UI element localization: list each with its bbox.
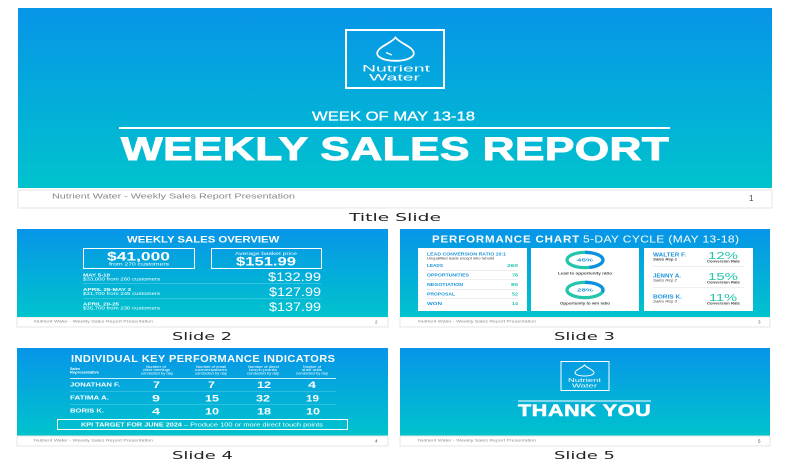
kpi box: total sales xyxy=(84,248,194,268)
heading: WEEKLY SALES OVERVIEW xyxy=(127,235,280,245)
callout: kpi target: KPI TARGET FOR JUNE 2024 xyxy=(81,422,182,428)
row: may 5-10: $33,000 from 260 customers xyxy=(83,276,161,282)
panel: title slide xyxy=(18,8,772,208)
table header: Sales xyxy=(70,367,80,371)
card: lead conversion: PROPOSAL xyxy=(427,292,455,296)
kpi box: basket price: $151.99 xyxy=(236,256,296,268)
card: lead conversion xyxy=(418,248,527,311)
caption: slide 2: Slide 2 xyxy=(172,330,232,343)
heading: thank you: THANK YOU xyxy=(518,402,651,420)
row: april 20-25: $137.99 xyxy=(269,302,321,314)
logo: Nutrient Water: Water xyxy=(369,72,420,84)
row: jonathan f. xyxy=(70,380,317,391)
card: sales reps: Sales Rep 2 xyxy=(653,278,678,282)
row: boris k.: 18 xyxy=(257,406,271,418)
table header: Number of direct xyxy=(248,365,279,369)
card: sales reps: WALTER F. xyxy=(653,252,687,258)
kpi box: basket price xyxy=(212,248,322,268)
panel: slide 4 kpi table xyxy=(17,348,388,446)
table header: Number of email xyxy=(196,365,226,369)
card: sales reps: Conversion Rate xyxy=(707,300,741,306)
divider line xyxy=(119,127,670,129)
heading: weekly sales report: WEEKLY SALES REPORT xyxy=(121,132,669,167)
row: jonathan f.: 7 xyxy=(208,380,215,391)
row: jonathan f.: 7 xyxy=(153,380,160,391)
footer text: Nutrient Water - Weekly Sales Report Presentation xyxy=(52,194,295,200)
card: lead conversion: NEGOTIATION xyxy=(427,282,463,287)
page number: 4 xyxy=(375,438,378,444)
row: april 29-may 3: APRIL 29-MAY 3 xyxy=(83,287,132,292)
row: may 5-10: MAY 5-10 xyxy=(83,272,111,278)
kpi box: basket price: Average basket price xyxy=(235,251,297,257)
card: sales reps: 11% xyxy=(709,293,737,304)
logo: Nutrient Water: Nutrient xyxy=(568,378,602,384)
heading: 5-day cycle: 5-DAY CYCLE (MAY 13-18) xyxy=(583,234,739,245)
table header xyxy=(70,365,328,376)
donut chart: 45% lead to opportunity: 45% xyxy=(577,258,593,262)
card: lead conversion: Unqualified leads except who rebuild xyxy=(427,256,494,260)
row: jonathan f.: 4 xyxy=(308,380,317,391)
card: sales reps: 12% xyxy=(708,251,738,262)
row: boris k. xyxy=(70,406,320,418)
table header: Number of xyxy=(146,365,166,369)
card: sales reps: JENNY A. xyxy=(653,274,682,280)
row: boris k.: 4 xyxy=(152,406,161,418)
page number: 5 xyxy=(758,438,761,444)
table header: Representative xyxy=(70,370,99,374)
row: may 5-10: $132.99 xyxy=(268,272,321,284)
row: jonathan f.: 12 xyxy=(257,380,271,391)
footer text: Nutrient Water - Weekly Sales Report Presentation xyxy=(418,438,536,442)
row: fatima a. xyxy=(70,394,319,404)
table header: conducted by day xyxy=(195,372,227,376)
kpi box: total sales: $41,000 xyxy=(107,252,170,264)
row: boris k.: 10 xyxy=(306,406,320,418)
donut chart: 45% lead to opportunity: Lead to opportunity ratio xyxy=(558,270,613,276)
row: april 29-may 3: $127.99 xyxy=(269,287,321,299)
card: sales reps: 15% xyxy=(708,272,738,283)
card: lead conversion: LEAD CONVERSION RATIO 10:1 xyxy=(427,252,507,256)
page number: 2 xyxy=(375,320,378,324)
row: fatima a.: 19 xyxy=(306,394,319,404)
row: may 5-10 xyxy=(83,272,321,284)
panel: slide 3 performance chart xyxy=(400,229,770,327)
card: sales reps: Conversion Rate xyxy=(707,280,741,284)
table header: client meetings xyxy=(143,368,170,372)
card: sales reps: Sales Rep 3 xyxy=(653,298,678,304)
table header: conducted by day xyxy=(141,372,173,376)
table header: touch points xyxy=(249,368,278,372)
card: lead conversion: 260 xyxy=(507,263,519,268)
row: fatima a.: 9 xyxy=(152,394,160,404)
card: donut charts xyxy=(531,248,639,311)
panel: slide 2 sales overview xyxy=(17,229,388,327)
card: lead conversion: 52 xyxy=(512,292,519,296)
row: fatima a.: 32 xyxy=(256,394,270,404)
donut chart: 28% opportunity to win: 28% xyxy=(577,288,593,292)
card: sales reps: Conversion Rate xyxy=(707,258,741,264)
divider line xyxy=(518,400,651,402)
card: lead conversion: WON xyxy=(427,301,442,306)
row: boris k.: BORIS K. xyxy=(70,408,105,414)
heading: performance chart: PERFORMANCE CHART xyxy=(432,234,580,245)
row: jonathan f.: JONATHAN F. xyxy=(70,382,121,388)
page number: 3 xyxy=(758,320,761,324)
caption: slide 4: Slide 4 xyxy=(172,449,233,462)
subtitle: week of: WEEK OF MAY 13-18 xyxy=(312,108,475,124)
donut chart: 28% opportunity to win xyxy=(560,282,611,306)
caption: slide 3: Slide 3 xyxy=(554,330,615,343)
table header: conversations xyxy=(195,368,228,372)
card: sales reps: BORIS K. xyxy=(653,294,683,300)
kpi box: total sales: from 270 customers xyxy=(109,262,170,268)
table header: shelf units xyxy=(302,368,322,372)
card: lead conversion: OPPORTUNITIES xyxy=(427,272,469,278)
table header: conducted by day xyxy=(247,372,279,376)
table header: Number of xyxy=(303,365,321,369)
row: april 29-may 3 xyxy=(83,287,321,299)
logo: Nutrient Water xyxy=(346,30,444,88)
footer text: Nutrient Water - Weekly Sales Report Presentation xyxy=(34,438,153,442)
card: sales reps xyxy=(644,248,753,311)
card: lead conversion: 78 xyxy=(512,272,519,278)
card: sales reps: Sales Rep 1 xyxy=(653,256,678,262)
card: lead conversion: LEADS xyxy=(427,263,443,268)
panel: slide 5 thank you xyxy=(400,348,770,446)
row: fatima a.: 15 xyxy=(205,394,220,404)
table header: conducted by day xyxy=(296,372,328,376)
callout: kpi target: – Produce 100 or more direct touch points xyxy=(184,422,324,428)
donut chart: 45% lead to opportunity xyxy=(558,252,613,276)
card: lead conversion: 14 xyxy=(512,301,519,306)
caption: slide 5: Slide 5 xyxy=(554,449,615,462)
footer text: Nutrient Water - Weekly Sales Report Presentation xyxy=(34,318,153,324)
row: april 29-may 3: $31,700 from 245 customers xyxy=(83,291,161,296)
callout: kpi target xyxy=(58,420,348,430)
logo: Nutrient Water: Water xyxy=(572,384,598,390)
card: lead conversion: 80 xyxy=(511,282,519,287)
row: april 20-25 xyxy=(83,302,321,314)
row: april 20-25: $35,700 from 230 customers xyxy=(83,306,161,310)
footer text: Nutrient Water - Weekly Sales Report Presentation xyxy=(418,318,536,324)
caption: title slide: Title Slide xyxy=(347,211,441,224)
row: fatima a.: FATIMA A. xyxy=(70,396,110,402)
donut chart: 28% opportunity to win: Opportunity to win ratio xyxy=(560,300,611,306)
page number: 1 xyxy=(749,194,754,203)
row: april 20-25: APRIL 20-25 xyxy=(83,302,120,306)
logo: Nutrient Water xyxy=(561,362,609,390)
heading: INDIVIDUAL KEY PERFORMANCE INDICATORS xyxy=(71,353,335,365)
logo: Nutrient Water: Nutrient xyxy=(362,64,431,74)
row: boris k.: 10 xyxy=(205,406,219,418)
